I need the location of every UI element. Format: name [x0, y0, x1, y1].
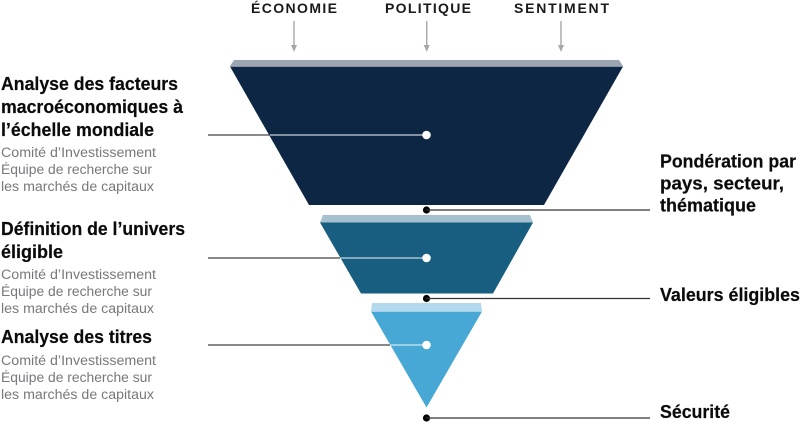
label: pondération: thématique [660, 196, 756, 216]
description: analyse des titres: Équipe de recherche sur [1, 370, 153, 385]
description: analyse des facteurs: Comité d’Investissement [1, 145, 156, 160]
label: pondération: pays, secteur, [660, 174, 784, 194]
heading: politique: POLITIQUE [385, 0, 471, 16]
label: valeurs éligibles: Valeurs éligibles [660, 285, 800, 305]
description: analyse des titres: Comité d’Investissement [1, 353, 156, 368]
heading: analyse des facteurs: l’échelle mondiale [1, 120, 154, 140]
text block: analyse des facteurs [1, 74, 184, 194]
connector: tier 3 to left label [208, 341, 431, 349]
arrow: économie [291, 21, 297, 52]
connector: sécurité [423, 414, 650, 422]
heading: analyse des facteurs: Analyse des facteurs [1, 74, 178, 94]
heading: définition de l'univers: éligible [1, 242, 63, 262]
description: analyse des titres: les marchés de capitaux [1, 387, 154, 402]
arrow: sentiment [558, 21, 564, 52]
label: pondération: Pondération par [660, 152, 796, 172]
connector: valeurs éligibles [423, 295, 650, 302]
funnel tier 1 [230, 60, 623, 205]
funnel tier 3 [371, 303, 482, 408]
description: analyse des facteurs: les marchés de capitaux [1, 179, 154, 194]
heading: analyse des facteurs: macroéconomiques à [1, 97, 184, 117]
funnel tier 2 [320, 215, 533, 294]
label: sécurité: Sécurité [660, 402, 730, 422]
connector: tier 1 to left label [208, 131, 431, 139]
connector: tier 2 to left label [208, 254, 431, 262]
heading: analyse des titres: Analyse des titres [1, 327, 152, 347]
connector: pondération [423, 206, 650, 214]
heading: sentiment: SENTIMENT [514, 0, 609, 16]
description: définition de l'univers: les marchés de capitaux [1, 301, 154, 316]
description: définition de l'univers: Équipe de recherche sur [1, 284, 153, 299]
text block: analyse des titres [1, 327, 156, 402]
heading: définition de l'univers: Définition de l’univers [1, 219, 185, 239]
description: analyse des facteurs: Équipe de recherche sur [1, 162, 153, 177]
heading: économie: ÉCONOMIE [251, 0, 337, 16]
description: définition de l'univers: Comité d’Investissement [1, 267, 156, 282]
arrow: politique [424, 21, 430, 52]
text block: définition de l'univers [1, 219, 185, 316]
